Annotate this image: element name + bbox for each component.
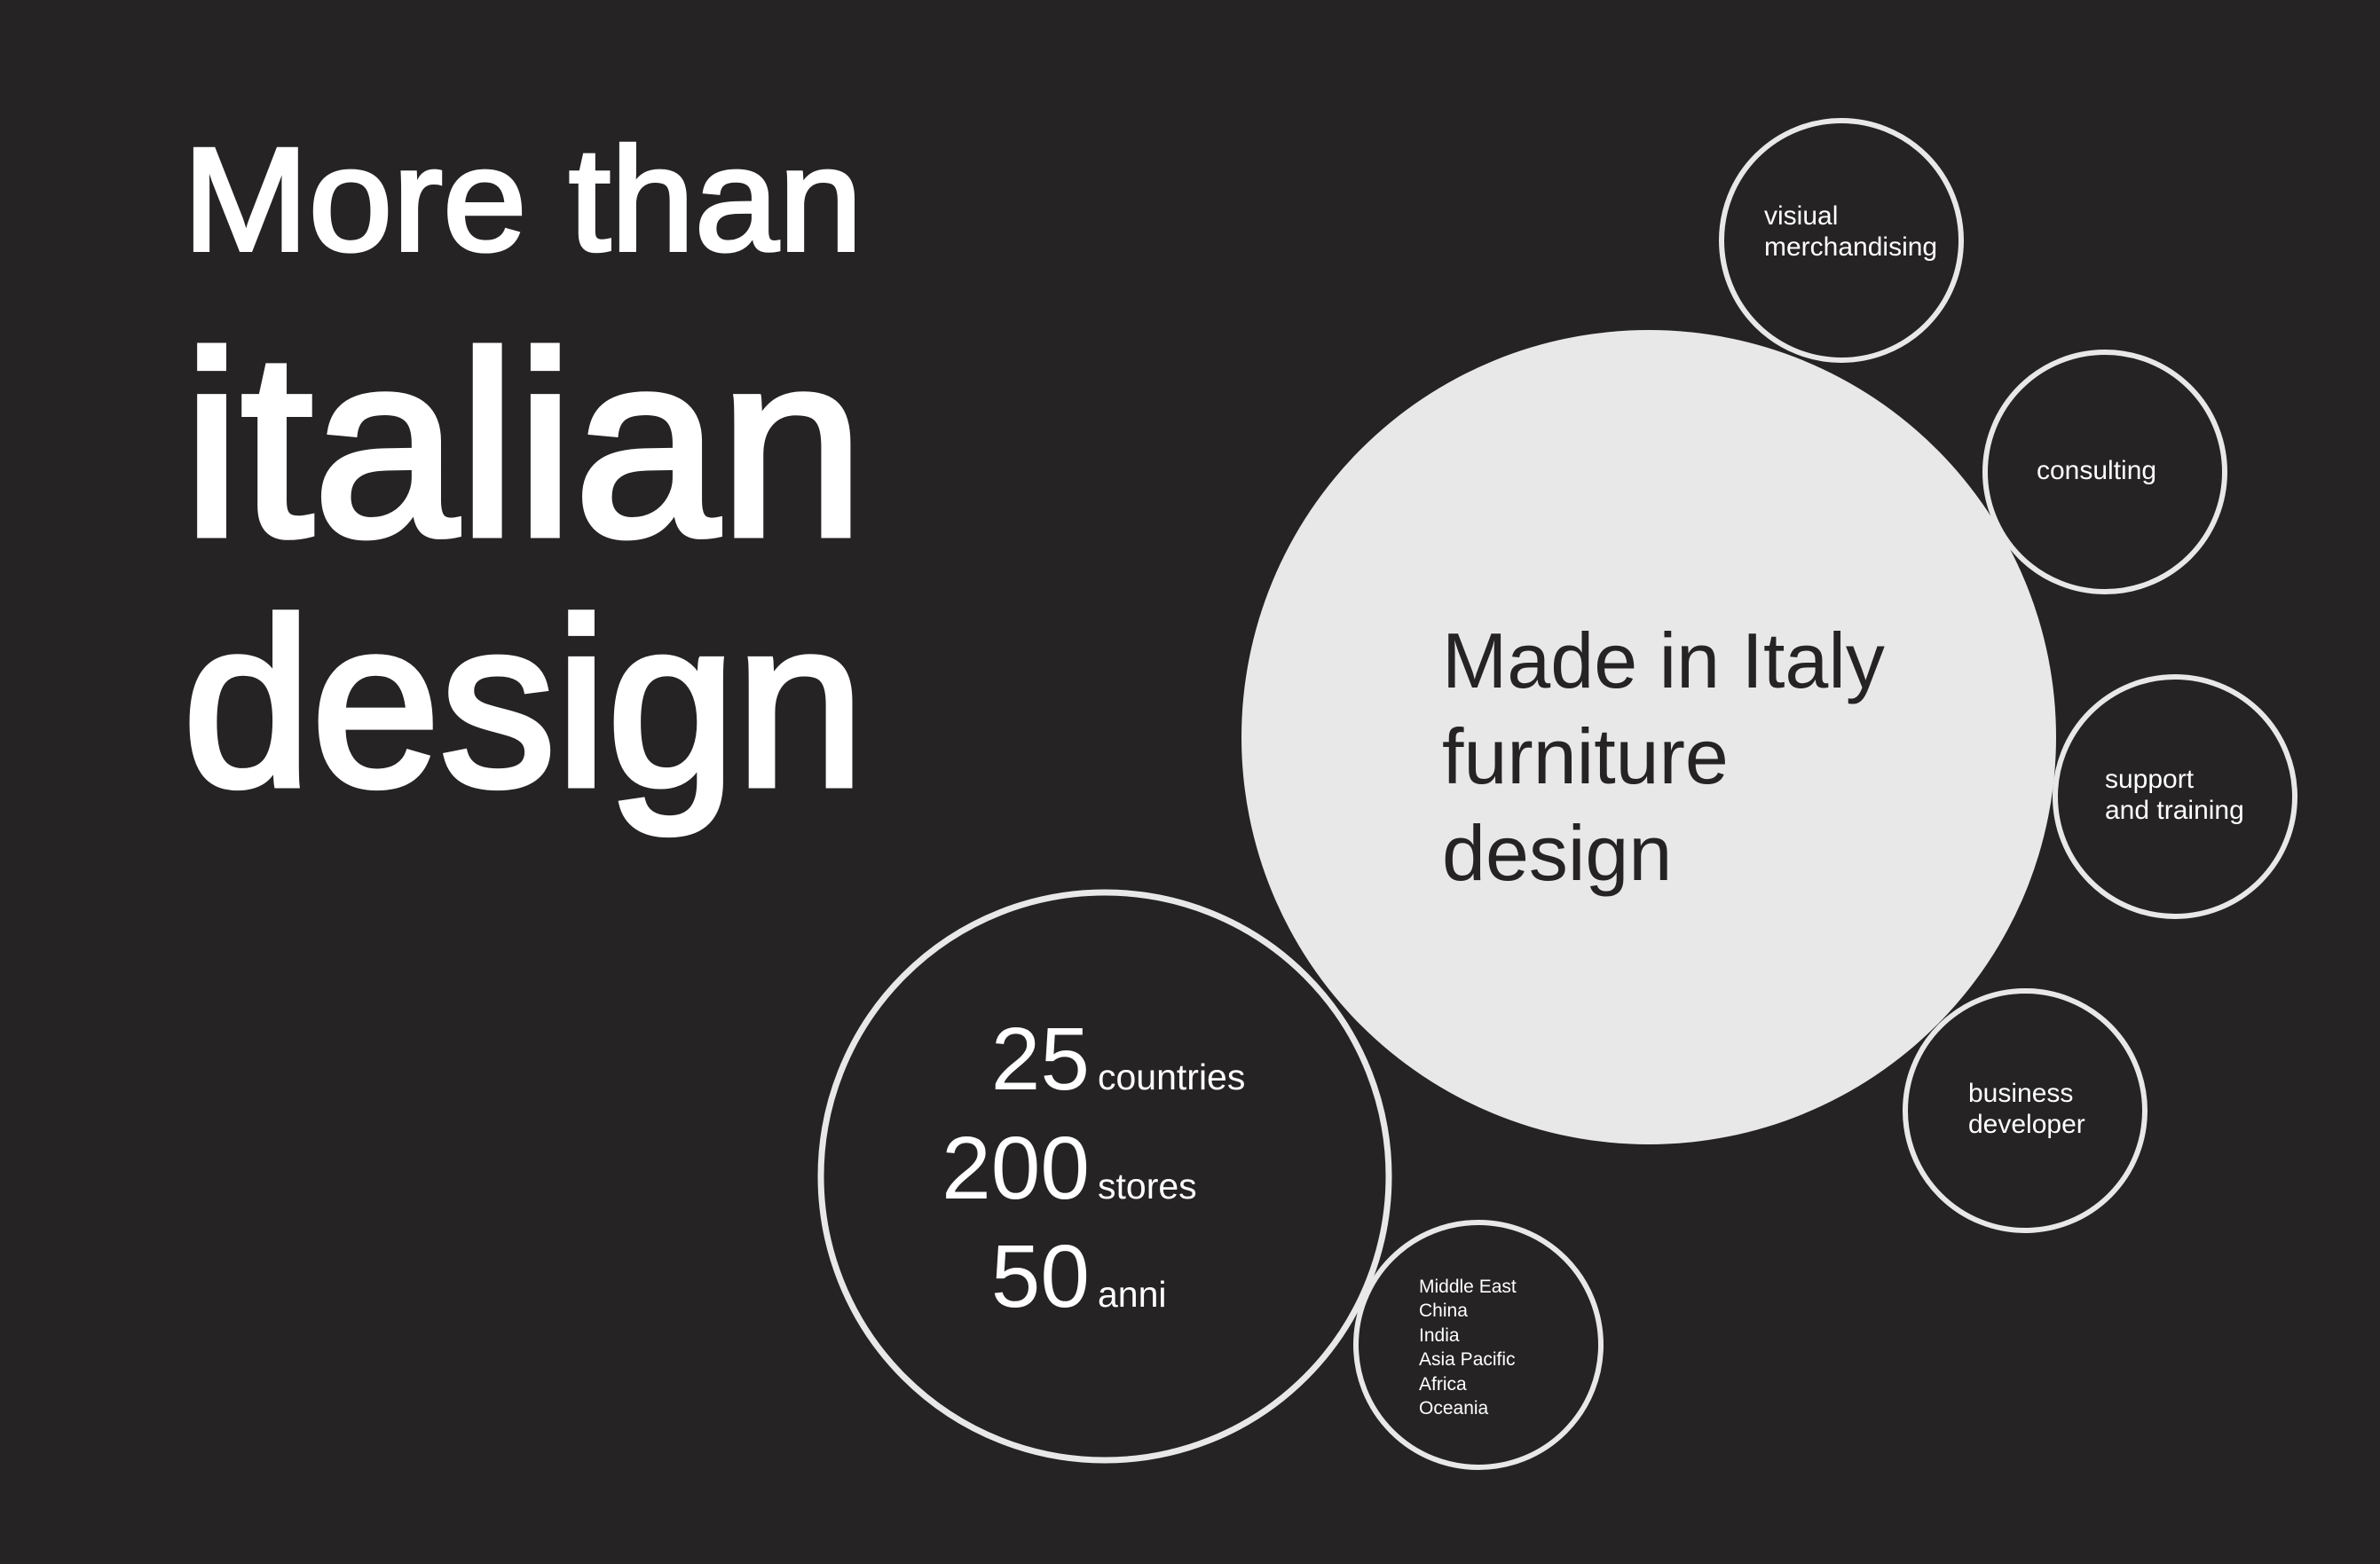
panel: regions circle: Middle East — [1419, 1277, 1517, 1297]
title: design — [183, 570, 864, 837]
circle: consulting — [1985, 352, 2225, 592]
panel: made in italy circle — [1241, 330, 2056, 1144]
panel: stats circle: countries — [1098, 1057, 1245, 1097]
title: More than — [183, 118, 863, 282]
panel: stats circle: 50 — [991, 1227, 1090, 1326]
title: italian — [183, 300, 864, 591]
panel: stats circle: 25 — [991, 1010, 1090, 1109]
panel: made in italy circle: design — [1442, 809, 1672, 897]
circle: business developer: developer — [1968, 1110, 2085, 1139]
panel: regions circle: Asia Pacific — [1419, 1349, 1516, 1370]
circle: support and training: support — [2105, 765, 2195, 794]
panel: made in italy circle: furniture — [1442, 712, 1729, 800]
circle: business developer — [1905, 991, 2145, 1230]
circle: support and training: and training — [2105, 796, 2244, 825]
panel: made in italy circle: Made in Italy — [1442, 617, 1885, 704]
panel: stats circle: stores — [1098, 1166, 1197, 1206]
circle: visual merchandising — [1722, 121, 1961, 360]
circle: visual merchandising: visiual — [1764, 201, 1838, 231]
panel: stats circle: anni — [1098, 1274, 1167, 1315]
title — [183, 118, 864, 837]
circle: business developer: business — [1968, 1079, 2073, 1108]
panel: stats circle — [821, 892, 1389, 1460]
circle: support and training — [2055, 677, 2295, 916]
panel: regions circle: India — [1419, 1325, 1460, 1346]
circle: visual merchandising: merchandising — [1764, 232, 1937, 262]
panel: regions circle — [1356, 1222, 1601, 1467]
panel: regions circle: Oceania — [1419, 1398, 1489, 1419]
circle: consulting: consulting — [2037, 456, 2156, 485]
panel: regions circle: Africa — [1419, 1374, 1467, 1395]
panel: regions circle: China — [1419, 1301, 1468, 1321]
panel: stats circle: 200 — [942, 1119, 1090, 1218]
